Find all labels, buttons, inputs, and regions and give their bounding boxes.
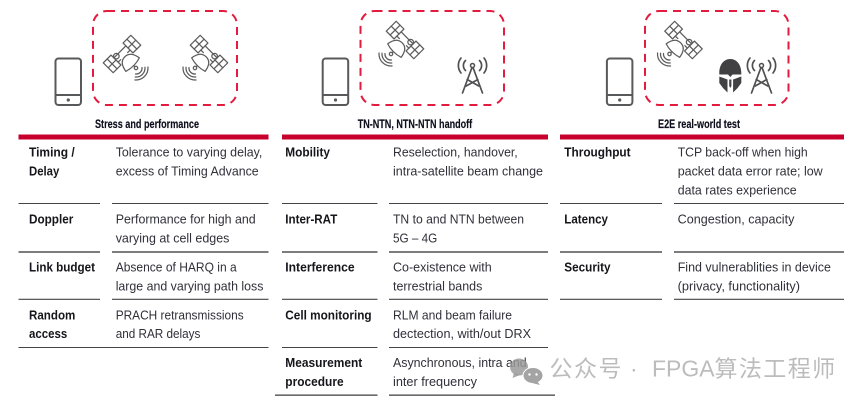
row: link budget: Link budget [29,260,96,274]
row: interference: Co-existence with [393,260,492,274]
row: random access: Random [29,308,75,322]
row: interference: terrestrial bands [393,280,482,294]
red heading bar [282,134,548,140]
row: mobility: intra-satellite beam change [393,164,543,178]
watermark text: · [630,356,638,382]
icon: satellite [647,21,702,76]
dashed satellite and tower box [360,11,504,105]
row: mobility: Mobility [285,146,330,160]
row: random access [29,308,244,341]
watermark text: 算法工程师 [714,356,836,382]
row: link budget: large and varying path loss [116,280,263,294]
row: interference: Interference [285,260,355,274]
icon: cell tower [747,58,776,93]
row: mobility [285,146,543,178]
row: timing delay: excess of Timing Advance [116,164,259,178]
icon: phone [56,58,81,105]
red heading bar [18,134,268,140]
row: link budget: Absence of HARQ in a [116,260,237,274]
icon: satellite right [173,35,228,90]
row: doppler: varying at cell edges [116,232,229,246]
row: measurement procedure: inter frequency [393,375,478,389]
panel: stress and performance [18,11,268,348]
row: security [564,260,831,294]
row: throughput: data rates experience [678,184,797,198]
icon: phone [607,58,632,105]
icon: cell tower [458,58,487,93]
panel: E2E real-world test [560,11,844,299]
row: link budget [29,260,263,294]
row: mobility: Reselection, handover, [393,146,518,160]
row: throughput: Throughput [564,146,631,160]
row: throughput: TCP back-off when high [678,146,808,160]
row: interference [285,260,492,294]
row: inter-RAT [285,212,524,246]
row: latency: Latency [564,212,608,226]
dashed satellite, attacker and tower box [645,11,788,105]
row: random access: access [29,327,67,341]
row: cell monitoring: dectection, with/out DRX [393,327,532,341]
row: random access: PRACH retransmissions [116,308,244,322]
row: measurement procedure: procedure [285,375,344,389]
icon: satellite [369,21,424,76]
heading: TN-NTN handoff: TN-NTN, NTN-NTN handoff [358,117,473,131]
row: doppler: Performance for high and [116,212,256,226]
row: throughput: packet data error rate; low [678,164,824,178]
heading: E2E real-world test: E2E real-world test [658,117,740,131]
row: timing delay: Timing / [29,146,75,160]
row: measurement procedure: Asynchronous, intra and [393,356,527,370]
row: doppler: Doppler [29,212,73,226]
icon: chat bubbles [510,358,543,385]
row: cell monitoring [285,308,532,341]
panel: TN-NTN handoff [275,11,555,395]
heading: stress and performance: Stress and performance [95,117,199,131]
row: security: Security [564,260,611,274]
red heading bar [560,134,844,140]
watermark text: FPGA [652,356,715,382]
icon: satellite left [103,35,158,90]
row: measurement procedure [285,356,527,389]
row: measurement procedure: Measurement [285,356,363,370]
row: timing delay: Tolerance to varying delay, [116,146,262,160]
row: cell monitoring: Cell monitoring [285,308,372,322]
row: security: (privacy, functionality) [678,280,800,294]
row: security: Find vulnerablities in device [678,260,831,274]
row: timing delay: Delay [29,164,59,178]
row: latency: Congestion, capacity [678,212,795,226]
row: doppler [29,212,256,246]
watermark [510,356,836,385]
icon: spartan helmet [719,59,741,92]
watermark text: 公众号 [550,356,623,382]
row: timing delay [29,146,262,178]
icon: phone [323,58,348,105]
row: inter-RAT: Inter-RAT [285,212,338,226]
row: inter-RAT: TN to and NTN between [393,212,524,226]
row: random access: and RAR delays [116,327,200,341]
row: latency [564,212,795,226]
row: cell monitoring: RLM and beam failure [393,308,512,322]
row: throughput [564,146,824,198]
row: inter-RAT: 5G – 4G [393,232,437,246]
dashed satellite group box [93,11,237,105]
